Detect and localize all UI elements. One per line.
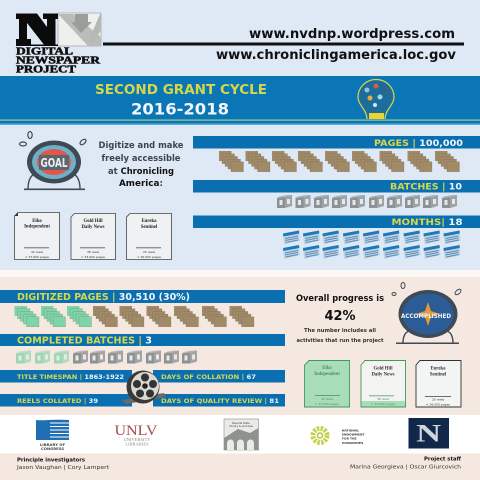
pictogram: batches target xyxy=(277,195,457,208)
stat: days of collation xyxy=(153,370,285,382)
icon: goal target xyxy=(20,132,87,190)
text: overall progress: activities that run the project xyxy=(296,338,384,344)
document: Gold Hill Daily News goal: Gold Hill xyxy=(83,219,103,224)
text: goal statement: America: xyxy=(119,179,163,189)
document: Gold Hill Daily News progress: Daily News xyxy=(371,372,395,378)
website URLs and rule: www.chroniclingamerica.loc.gov xyxy=(216,48,457,63)
pictogram: digitized page stacks xyxy=(14,306,254,327)
stat: reels collated xyxy=(0,394,132,406)
website URLs and rule xyxy=(103,27,464,63)
bar: completed batches xyxy=(0,334,285,346)
document: Eureka Sentinel goal: 20 reels xyxy=(143,250,155,254)
text: overall progress: The number includes all xyxy=(304,328,376,334)
title: second grant cycle: SECOND GRANT CYCLE xyxy=(95,83,267,98)
title banner xyxy=(0,76,480,125)
logo: Nevada Digital Newspaper Project: NEWSPAPER xyxy=(16,56,101,66)
bar: months target: MONTHS| 18 xyxy=(392,218,462,228)
stat: title timespan: TITLE TIMESPAN | 1863-1922 xyxy=(17,373,124,382)
stat: days of quality review: DAYS OF QUALITY REVIEW | 81 xyxy=(161,397,280,406)
document: Eureka Sentinel progress: Eureka xyxy=(430,366,446,372)
bar: months target xyxy=(193,216,480,228)
document: Eureka Sentinel goal: Sentinel xyxy=(141,225,158,230)
logo: Library of Congress xyxy=(36,420,69,451)
bar: digitized pages xyxy=(0,290,285,303)
logo: Nevada State Library and Archives: Library & Archives xyxy=(229,424,254,428)
logo: UNLV University Libraries: LIBRARIES xyxy=(125,442,149,446)
document: Elko Independent goal: Independent xyxy=(24,224,50,230)
icon: light bulb xyxy=(358,80,394,119)
bar: batches target xyxy=(193,180,480,192)
document: Gold Hill Daily News progress xyxy=(361,360,406,407)
text: goal statement xyxy=(98,141,184,189)
logo: Library of Congress: CONGRESS xyxy=(41,446,64,451)
pictogram: page stacks target xyxy=(219,151,460,172)
bar: digitized pages: DIGITIZED PAGES | 30,510 (30%) xyxy=(17,292,190,303)
logo: Nevada State Library and Archives xyxy=(224,419,258,450)
stat: days of quality review xyxy=(153,394,285,406)
document: Eureka Sentinel progress: Sentinel xyxy=(430,372,447,378)
logo: UNLV University Libraries: UNIVERSITY xyxy=(124,437,151,442)
document: Gold Hill Daily News progress: Gold Hill xyxy=(373,366,393,372)
document: Gold Hill Daily News progress: = 33,000 pages xyxy=(371,402,395,406)
document: Elko Independent progress: Elko xyxy=(322,366,332,371)
document: Gold Hill Daily News progress: 38 reels xyxy=(377,397,389,401)
document: Gold Hill Daily News goal xyxy=(71,214,116,260)
logo: Library of Congress: LIBRARY OF xyxy=(40,442,66,447)
document: Elko Independent goal: = 37,600 pages xyxy=(25,255,49,259)
logo: Nevada Digital Newspaper Project: DIGITAL xyxy=(16,46,73,58)
bar: batches target: BATCHES | 10 xyxy=(390,182,462,192)
credits: principal investigators: Jason Vaughan | Cory Lampert xyxy=(16,465,109,471)
credits: project staff: Marina Georgieva | Oscar Giurcovich xyxy=(350,464,461,470)
logo: National Endowment for the Humanities xyxy=(313,428,365,445)
pictogram: completed batches xyxy=(16,350,197,364)
credits: principal investigators xyxy=(16,458,109,471)
logo: National Endowment for the Humanities: FOR THE xyxy=(342,436,357,440)
document: Gold Hill Daily News goal: = 33,000 pages xyxy=(81,255,105,259)
bar: pages target xyxy=(193,136,480,149)
logo: UNLV University Libraries xyxy=(114,423,158,446)
document: Eureka Sentinel progress xyxy=(416,360,461,407)
text: overall progress: Overall progress is xyxy=(296,294,384,304)
text: goal statement: freely accessible xyxy=(102,154,181,164)
icon: film reel xyxy=(122,370,166,404)
document: Elko Independent progress: = 37,600 pages xyxy=(315,402,339,406)
logo: National Endowment for the Humanities: NATIONAL xyxy=(342,428,359,432)
bar: pages target: PAGES | 100,000 xyxy=(374,139,463,149)
document: Elko Independent goal xyxy=(14,212,60,260)
document: Eureka Sentinel goal xyxy=(126,214,172,260)
bar: completed batches: COMPLETED BATCHES | 3 xyxy=(17,336,152,346)
logo: UNLV University Libraries: UNLV xyxy=(114,423,158,439)
logo: Nevada State Library and Archives: Nevada State xyxy=(232,421,250,425)
logo: University of Nevada N xyxy=(408,418,449,448)
logo: Nevada Digital Newspaper Project xyxy=(16,13,101,76)
document: Elko Independent goal: Elko xyxy=(32,219,42,224)
text: goal statement: Digitize and make xyxy=(98,141,184,151)
logo strip xyxy=(0,415,480,454)
figure: 42 percent: 42% xyxy=(324,309,356,324)
background: bottom section xyxy=(0,277,480,480)
logo: National Endowment for the Humanities: HUMANITIES xyxy=(342,441,363,445)
stat: reels collated: REELS COLLATED | 39 xyxy=(17,397,98,406)
logo: Nevada Digital Newspaper Project: PROJECT xyxy=(16,64,76,76)
stat: title timespan xyxy=(0,370,132,382)
document: Eureka Sentinel goal: Eureka xyxy=(141,219,157,224)
icon: goal target: GOAL xyxy=(40,156,68,170)
subtitle: years: 2016-2018 xyxy=(131,100,229,118)
document: Eureka Sentinel progress: = 39,500 pages xyxy=(426,402,450,406)
pictogram: months target xyxy=(283,230,460,259)
credits: principal investigators: Principle investigators xyxy=(17,458,85,464)
document: Elko Independent goal: 42 reels xyxy=(31,250,43,254)
document: Gold Hill Daily News goal: 38 reels xyxy=(87,250,99,254)
website URLs and rule: www.nvdnp.wordpress.com xyxy=(249,27,455,42)
credits: project staff xyxy=(350,456,462,470)
document: Elko Independent progress: 42 reels xyxy=(321,397,333,401)
logo: National Endowment for the Humanities: ENDOWMENT xyxy=(342,432,365,436)
text: overall progress xyxy=(296,294,384,344)
document: Elko Independent progress: Independent xyxy=(314,372,340,377)
background: top section xyxy=(0,0,480,270)
credits: project staff: Project staff xyxy=(424,456,462,462)
document: Elko Independent progress xyxy=(304,360,350,407)
icon: accomplished badge: ACCOMPLISHED xyxy=(401,312,452,320)
logo: University of Nevada N: N xyxy=(416,420,441,448)
icon: accomplished badge xyxy=(392,282,462,344)
document: Gold Hill Daily News goal: Daily News xyxy=(81,225,105,230)
stat: days of collation: DAYS OF COLLATION | 67 xyxy=(161,373,256,382)
document: Eureka Sentinel goal: = 30,500 pages xyxy=(137,255,161,259)
document: Eureka Sentinel progress: 20 reels xyxy=(432,398,444,402)
text: goal statement: at Chronicling xyxy=(108,167,174,177)
